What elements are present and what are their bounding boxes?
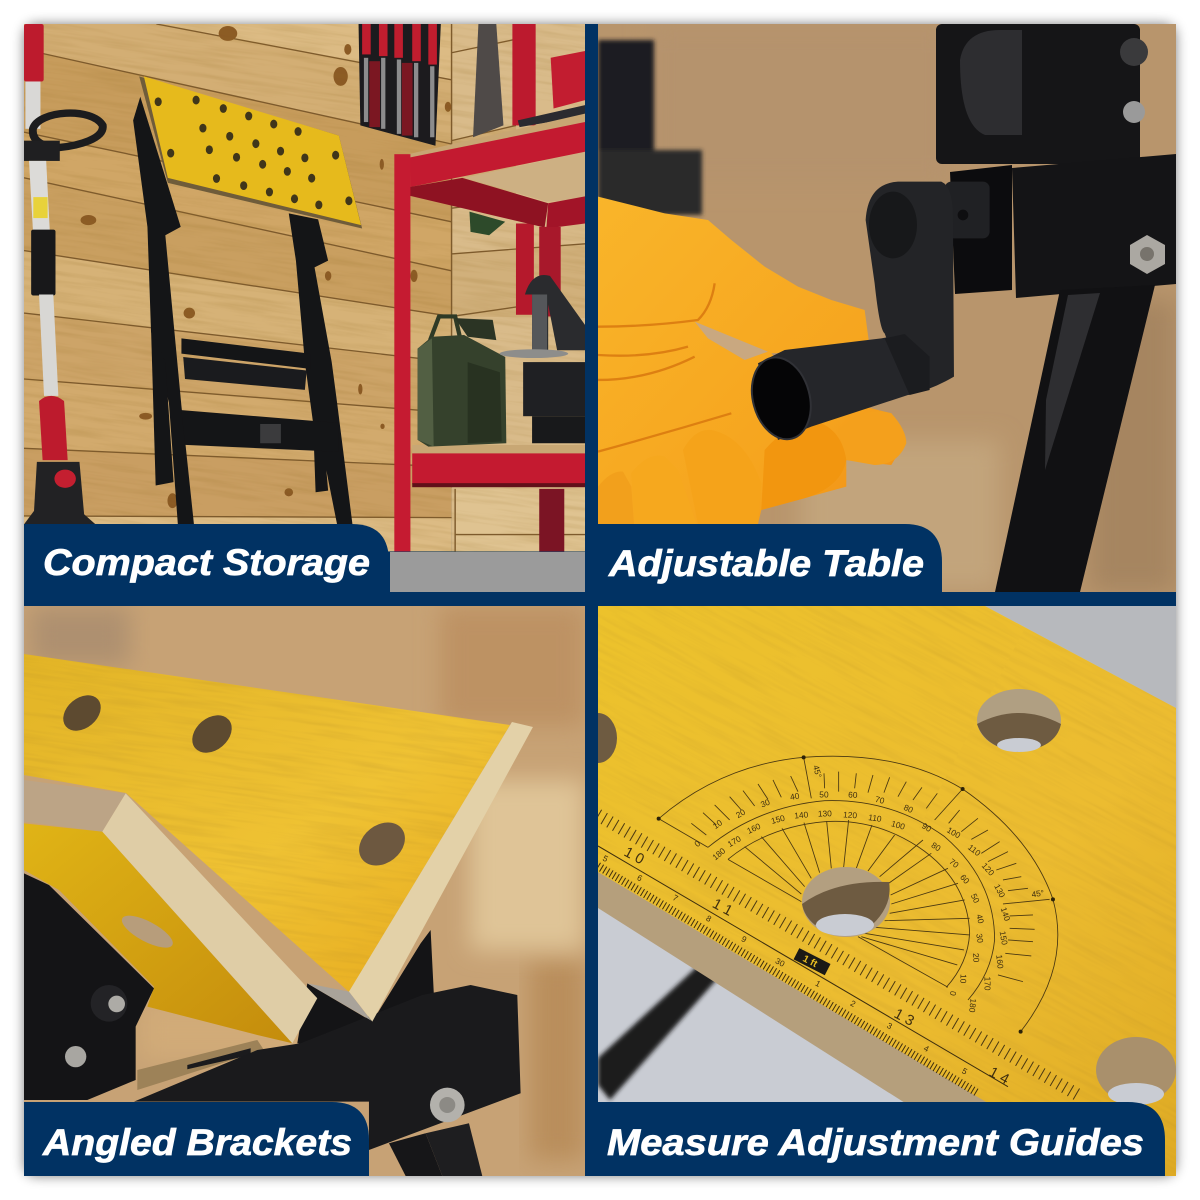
table leg (995, 285, 1155, 592)
protractor scale (659, 756, 1058, 1032)
orange glove (598, 197, 906, 524)
hand saw and wall items (469, 24, 585, 315)
protractor markers and degree numbers: 10 (711, 817, 724, 831)
measuring rulers: 1 4 (986, 1064, 1012, 1088)
crank handle arm (866, 182, 990, 395)
protractor markers and degree numbers: 60 (848, 789, 858, 800)
label: angled brackets (24, 1102, 369, 1176)
protractor markers and degree numbers: 45° (1031, 888, 1045, 899)
protractor markers and degree numbers: 130 (992, 882, 1008, 900)
panel: measure adjustment guides (579, 606, 1176, 1176)
measuring rulers: 30 (774, 956, 787, 969)
protractor markers and degree numbers: 30 (974, 933, 986, 944)
protractor markers and degree numbers: 160 (994, 954, 1006, 969)
label: measure adjustment guides: Measure Adjustment Guides (607, 1122, 1144, 1163)
protractor markers and degree numbers: 20 (971, 953, 982, 963)
line trimmer (24, 24, 103, 524)
protractor markers and degree numbers: 100 (890, 818, 907, 832)
panel: compact storage (24, 24, 585, 592)
protractor markers and degree numbers: 170 (726, 833, 743, 849)
protractor markers and degree numbers: 80 (902, 802, 915, 815)
bench sander (500, 275, 585, 443)
protractor markers and degree numbers: 60 (958, 872, 972, 886)
protractor markers and degree numbers: 40 (974, 913, 986, 925)
MDF board edge (598, 872, 986, 1102)
protractor markers and degree numbers: 0 (948, 990, 959, 997)
protractor markers and degree numbers: 110 (868, 812, 883, 824)
measuring rulers: 5 (601, 853, 610, 864)
label: compact storage: Compact Storage (43, 542, 370, 583)
crank grip (743, 334, 930, 446)
protractor markers and degree numbers: 30 (759, 797, 772, 810)
wooden wall (24, 24, 585, 551)
panel: angled brackets (24, 606, 585, 1176)
protractor markers and degree numbers: 100 (945, 825, 963, 841)
protractor markers and degree numbers: 180 (967, 998, 979, 1013)
wood grain (24, 24, 585, 552)
protractor markers and degree numbers: 50 (819, 789, 829, 799)
measuring rulers: 4 (922, 1043, 931, 1054)
grey floor backdrop (598, 606, 1176, 1102)
red shelving unit (394, 114, 585, 551)
measuring rulers: 1 0 (621, 844, 647, 868)
label: adjustable table (590, 524, 942, 592)
protractor markers and degree numbers: 45° (811, 764, 824, 779)
protractor markers and degree numbers: 70 (874, 794, 886, 806)
label: angled brackets: Angled Brackets (42, 1122, 352, 1163)
front and right board edges (24, 722, 533, 1043)
protractor markers and degree numbers: 0 (692, 838, 702, 849)
measuring rulers: 5 (960, 1066, 969, 1077)
blurred black leg (598, 964, 718, 1100)
protractor markers and degree numbers: 110 (966, 842, 983, 858)
black side bracket (24, 873, 154, 1100)
label: compact storage (24, 524, 389, 592)
protractor markers and degree numbers: 70 (947, 856, 961, 870)
label: measure adjustment guides (586, 1102, 1165, 1176)
upper yellow board with holes (24, 640, 524, 1000)
panel: adjustable table (598, 24, 1176, 592)
label: adjustable table: Adjustable Table (608, 543, 924, 584)
green jerry can (418, 316, 506, 447)
protractor markers and degree numbers: 50 (969, 892, 982, 905)
measuring rulers: 6 (635, 872, 645, 883)
measuring rulers: 2 (849, 998, 858, 1009)
protractor markers and degree numbers: 120 (980, 861, 997, 878)
protractor markers and degree numbers: 130 (818, 808, 832, 819)
protractor markers and degree numbers: 160 (745, 821, 762, 836)
measuring rulers: 1 (814, 978, 823, 989)
protractor markers and degree numbers: 170 (983, 977, 993, 991)
protractor markers and degree numbers: 150 (998, 930, 1010, 946)
measuring rulers: 3 (885, 1020, 894, 1031)
upper black bracket (936, 24, 1148, 164)
black bench frame and legs (134, 930, 521, 1176)
folded workbench frame (133, 97, 352, 524)
blurred dark background frame (598, 40, 702, 215)
upper right grey backdrop (985, 606, 1176, 708)
protractor markers and degree numbers: 180 (710, 845, 728, 862)
protractor markers and degree numbers: 80 (930, 840, 943, 853)
measuring rulers: 1 3 (891, 1006, 917, 1030)
blurred wood backdrop (24, 606, 585, 1176)
measuring rulers: 1 1 (709, 896, 735, 920)
measuring rulers: 9 (740, 934, 749, 945)
protractor markers and degree numbers: 40 (789, 790, 800, 802)
protractor markers and degree numbers: 120 (843, 809, 858, 820)
side bracket with bolt (950, 154, 1176, 298)
floor (390, 552, 585, 592)
measuring rulers: 7 (671, 892, 680, 903)
measuring rulers: 8 (704, 913, 713, 924)
protractor markers and degree numbers: 90 (920, 821, 934, 834)
protractor markers and degree numbers: 140 (794, 809, 809, 821)
protractor markers and degree numbers: 150 (770, 813, 786, 826)
yellow table surface (598, 606, 1176, 1176)
protractor markers and degree numbers: 10 (958, 974, 969, 984)
tool roll (359, 24, 441, 146)
protractor markers and degree numbers (657, 755, 1055, 1034)
measuring rulers: 1 ft (801, 954, 820, 970)
central hole (802, 867, 890, 937)
blurred wood backdrop (598, 24, 1176, 592)
protractor markers and degree numbers: 20 (734, 807, 747, 820)
table holes (579, 689, 1176, 1105)
protractor markers and degree numbers: 140 (999, 906, 1013, 922)
folded yellow table top (139, 76, 362, 229)
measuring rulers (598, 815, 1078, 1095)
